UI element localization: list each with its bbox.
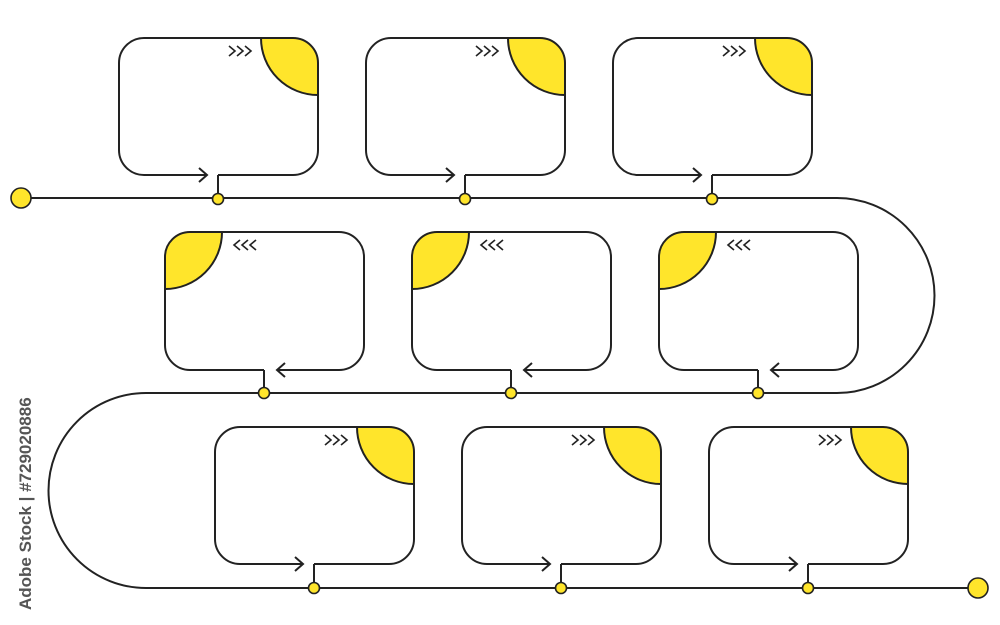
box 3 <box>613 38 812 182</box>
timeline dots <box>11 188 988 598</box>
timeline path <box>31 198 968 588</box>
stubs <box>218 175 808 588</box>
watermark caption: Adobe Stock | #729020886 <box>16 397 35 610</box>
box 8 <box>462 427 661 571</box>
box 4 <box>165 232 364 377</box>
box 9 <box>709 427 908 571</box>
box 2 <box>366 38 565 182</box>
box 1 <box>119 38 318 182</box>
box 7 <box>215 427 414 571</box>
box 5 <box>412 232 611 377</box>
box 6 <box>659 232 858 377</box>
